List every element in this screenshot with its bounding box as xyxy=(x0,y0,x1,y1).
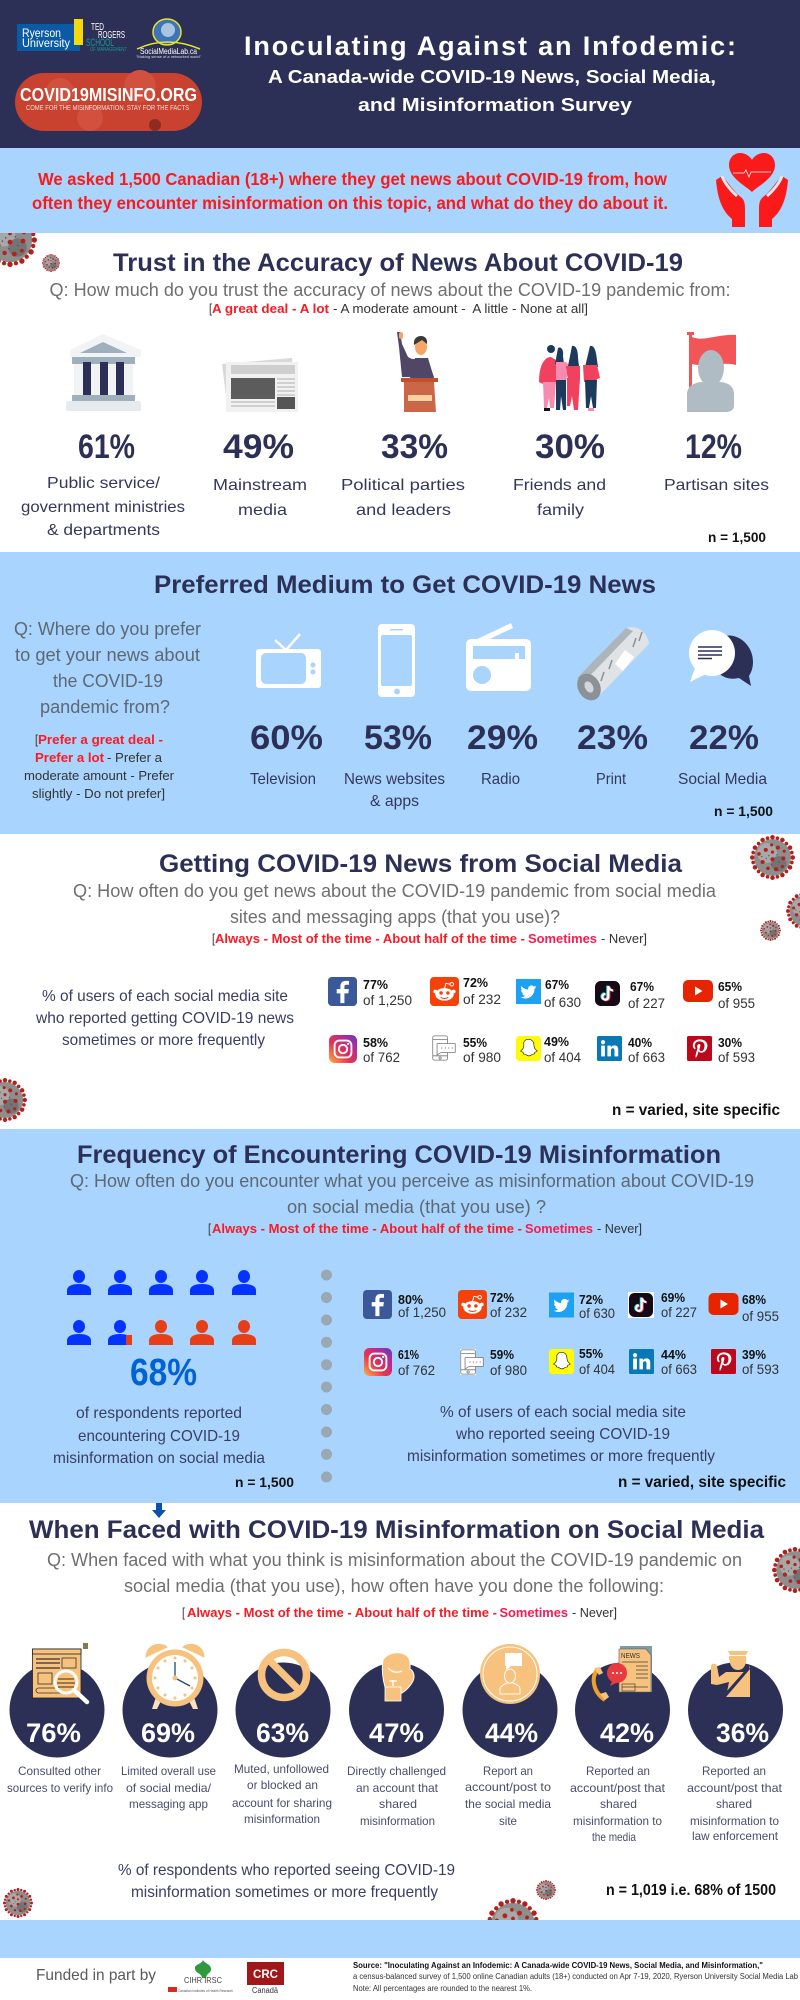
stat: public service: & departments xyxy=(47,522,160,539)
action: report to media xyxy=(570,1646,670,1844)
action: muted unfollowed or blocked xyxy=(232,1652,332,1826)
logo: COVID19MISINFO.ORG xyxy=(15,70,202,131)
response scale xyxy=(212,932,647,946)
stat: political parties: and leaders xyxy=(356,502,451,519)
stat: TikTok: 69% xyxy=(661,1290,685,1305)
stat: television: Television xyxy=(250,771,316,788)
description xyxy=(407,1404,715,1465)
action: report to law enforcement xyxy=(687,1651,783,1843)
title: Inoculating Against an Infodemic: xyxy=(244,31,736,61)
stat: print: Print xyxy=(596,771,626,788)
action: muted unfollowed or blocked: account for sharing xyxy=(232,1796,332,1810)
logo: SocialMediaLab xyxy=(136,19,202,59)
logo: Ted Rogers School of Management: OF MANAGEMENT xyxy=(90,47,127,53)
stat: mainstream media: Mainstream xyxy=(213,477,307,494)
stat: Snapchat xyxy=(516,1034,581,1065)
action: limited overall use: messaging app xyxy=(129,1797,208,1811)
action: report to site: site xyxy=(499,1814,517,1828)
action: directly challenged: misinformation xyxy=(360,1814,435,1828)
action: report to media: account/post that xyxy=(570,1781,666,1795)
logo: SocialMediaLab: SocialMediaLab.ca xyxy=(140,47,197,56)
stat: Twitter: 72% xyxy=(579,1292,603,1307)
stat: Instagram: 58% xyxy=(363,1035,388,1050)
icon: police officer xyxy=(711,1651,750,1697)
action: directly challenged: 47% xyxy=(369,1718,424,1748)
description: who reported getting COVID-19 news xyxy=(35,1010,294,1027)
stat: partisan sites xyxy=(664,428,769,494)
stat: Pinterest: 30% xyxy=(718,1035,742,1050)
question: on social media (that you use) ? xyxy=(287,1197,546,1217)
stat: YouTube xyxy=(708,1292,779,1324)
action: consulted other sources: Consulted other xyxy=(18,1764,101,1778)
response scale: [ xyxy=(182,1606,185,1620)
stat: friends and family: 30% xyxy=(535,428,605,466)
action: limited overall use: Limited overall use xyxy=(121,1764,216,1778)
action: report to law enforcement: Reported an xyxy=(702,1764,766,1778)
sample size: n = varied, site specific xyxy=(612,1102,780,1119)
action: report to law enforcement: 36% xyxy=(716,1718,769,1748)
stat: radio: 29% xyxy=(467,719,538,757)
stat: Twitter: of 630 xyxy=(579,1305,615,1321)
stat: messaging apps: of 980 xyxy=(463,1049,501,1065)
response scale xyxy=(209,302,588,316)
logo: Ted Rogers School of Management xyxy=(86,22,127,53)
response scale: - Prefer a xyxy=(107,751,162,765)
action: muted unfollowed or blocked: misinformation xyxy=(244,1812,320,1826)
icon: speech bubbles xyxy=(689,630,753,686)
panel: intro band xyxy=(0,148,800,233)
response scale: Prefer a great deal - xyxy=(38,733,163,747)
heading: Getting COVID-19 News from Social Media xyxy=(159,850,683,878)
stat: friends and family xyxy=(513,428,606,519)
stat: news websites xyxy=(344,719,445,810)
stat: Facebook: 77% xyxy=(363,977,388,992)
stat: Facebook: of 1,250 xyxy=(398,1304,446,1320)
logo: CRC Canada: Canadä xyxy=(252,1986,279,1995)
stat: friends and family: family xyxy=(537,502,584,519)
pictogram: people xyxy=(67,1270,256,1345)
action: muted unfollowed or blocked: Muted, unfollowed xyxy=(234,1762,329,1776)
response scale: A great deal - A lot xyxy=(212,302,330,316)
panel: footer xyxy=(36,1960,799,1995)
intro text xyxy=(32,169,668,213)
response scale: [ xyxy=(208,1222,211,1236)
stat: LinkedIn: 44% xyxy=(661,1347,686,1362)
icon: government building xyxy=(66,334,141,411)
description: sometimes or more frequently xyxy=(62,1032,265,1049)
action: report to site: account/post to xyxy=(465,1780,551,1794)
stat: TikTok xyxy=(595,979,665,1011)
stat: messaging apps: of 980 xyxy=(490,1362,527,1378)
logo: COVID19MISINFO.ORG: COME FOR THE MISINFORMATION. STAY FOR THE FACTS xyxy=(26,105,189,112)
stat: TikTok: of 227 xyxy=(661,1304,697,1320)
response scale: [ xyxy=(35,733,38,747)
response scale: - A moderate amount - A little - None at all] xyxy=(333,302,588,316)
response scale: Always - Most of the time - About half of the time - xyxy=(215,932,525,946)
stat: public service: Public service/ xyxy=(47,475,161,492)
stat: messaging apps: 59% xyxy=(490,1347,514,1362)
icon: person reporting xyxy=(480,1644,540,1704)
response scale: [ xyxy=(209,302,212,316)
description: misinformation sometimes or more frequently xyxy=(131,1884,438,1901)
action: directly challenged xyxy=(347,1653,446,1828)
stat: Instagram xyxy=(364,1347,435,1378)
action: limited overall use: of social media/ xyxy=(126,1781,212,1795)
source note: Source: "Inoculating Against an Infodemic: A Canada-wide COVID-19 News, Social Media, and Misinformation," xyxy=(353,1960,763,1970)
icon: radio xyxy=(466,623,531,691)
logo: Ted Rogers School of Management: ROGERS xyxy=(98,30,125,41)
question: sites and messaging apps (that you use)? xyxy=(230,907,560,927)
stat: Twitter: of 630 xyxy=(544,994,581,1010)
logo: Ryerson University: University xyxy=(22,38,70,50)
stat: television xyxy=(250,719,323,788)
sample size: n = 1,019 i.e. 68% of 1500 xyxy=(606,1882,776,1899)
stat: TikTok: of 227 xyxy=(628,995,665,1011)
logo: CIHR: CIHR IRSC xyxy=(184,1975,222,1985)
action: report to law enforcement: law enforcement xyxy=(692,1829,779,1843)
response scale xyxy=(24,733,174,801)
title xyxy=(244,31,736,115)
arrow xyxy=(152,1503,166,1518)
response scale: Always - Most of the time - About half of the time - xyxy=(212,1222,522,1236)
logo: CIHR xyxy=(168,1960,233,1993)
intro text: often they encounter misinformation on this topic, and what do they do about it. xyxy=(32,193,668,213)
icon: boxing glove xyxy=(382,1653,414,1701)
action: report to media: 42% xyxy=(600,1718,654,1748)
response scale: [ xyxy=(212,932,215,946)
question: pandemic from? xyxy=(40,697,170,717)
stat: Instagram: of 762 xyxy=(363,1049,400,1065)
question: Q: When faced with what you think is misinformation about the COVID-19 pandemic on xyxy=(47,1550,742,1570)
action: report to law enforcement: shared xyxy=(716,1797,752,1811)
description: % of users of each social media site xyxy=(440,1404,686,1421)
stat: partisan sites: 12% xyxy=(685,428,742,466)
stat: TikTok xyxy=(628,1290,697,1320)
stat: messaging apps xyxy=(460,1347,527,1378)
action: report to site: 44% xyxy=(485,1718,538,1748)
stat: Facebook xyxy=(363,1290,446,1320)
action: limited overall use: 69% xyxy=(141,1718,195,1748)
question: to get your news about xyxy=(15,645,200,665)
stat: Twitter xyxy=(549,1292,615,1321)
icon: partisan flag and person xyxy=(687,332,736,412)
stat: Reddit xyxy=(458,1290,527,1320)
stat: Snapchat: 49% xyxy=(544,1034,569,1049)
logo: COVID19MISINFO.ORG: COVID19MISINFO.ORG xyxy=(20,85,197,105)
band: bottom divider xyxy=(0,1920,800,1958)
stat: Snapchat: of 404 xyxy=(579,1361,615,1377)
response scale xyxy=(208,1222,642,1236)
heading: Frequency of Encountering COVID-19 Misinformation xyxy=(77,1141,721,1169)
source note: Note: All percentages are rounded to the nearest 1%. xyxy=(353,1984,532,1993)
response scale: slightly - Do not prefer] xyxy=(32,787,165,801)
action: directly challenged: Directly challenged xyxy=(347,1764,446,1778)
action: report to site: the social media xyxy=(465,1797,551,1811)
stat: Reddit xyxy=(430,975,501,1007)
stat: Pinterest xyxy=(711,1347,779,1377)
action: directly challenged: shared xyxy=(379,1797,417,1811)
icon: prohibited sign xyxy=(262,1652,306,1698)
response scale xyxy=(182,1606,617,1620)
description: encountering COVID-19 xyxy=(78,1428,240,1445)
panel: frequency of encountering misinformation xyxy=(0,1129,800,1503)
stat: TikTok: 67% xyxy=(630,979,654,994)
stat: YouTube xyxy=(683,979,755,1011)
response scale: moderate amount - Prefer xyxy=(24,769,174,783)
response scale: - Never] xyxy=(601,932,647,946)
question: Q: How much do you trust the accuracy of news about the COVID-19 pandemic from: xyxy=(50,280,730,300)
description xyxy=(35,988,294,1049)
action: limited overall use xyxy=(121,1644,218,1811)
description: % of respondents who reported seeing COVID-19 xyxy=(118,1862,455,1879)
sample size: n = 1,500 xyxy=(708,529,766,545)
stat: Twitter xyxy=(516,977,581,1010)
response scale: Always - Most of the time - About half of the time - xyxy=(187,1606,497,1620)
stat: Facebook: 80% xyxy=(398,1292,423,1307)
description xyxy=(118,1862,455,1901)
action: directly challenged: an account that xyxy=(356,1781,439,1795)
heading: Trust in the Accuracy of News About COVID-19 xyxy=(113,249,683,277)
stat: Pinterest: of 593 xyxy=(718,1049,755,1065)
icon: friends and family xyxy=(539,345,600,411)
logo: CIHR: Canadian Institutes of Health Research xyxy=(178,1988,233,1993)
icon: politician at podium xyxy=(397,332,438,412)
stat: Reddit: of 232 xyxy=(490,1304,527,1320)
stat: mainstream media xyxy=(213,428,307,519)
question: Q: How often do you encounter what you perceive as misinformation about COVID-19 xyxy=(70,1171,754,1191)
response scale: Sometimes xyxy=(528,932,597,946)
logo: Ryerson University xyxy=(17,19,83,51)
title: and Misinformation Survey xyxy=(358,94,633,115)
source note xyxy=(353,1960,799,1993)
icon: alarm clock xyxy=(146,1644,204,1709)
stat: political parties: Political parties xyxy=(341,477,465,494)
intro text: We asked 1,500 Canadian (18+) where they get news about COVID-19 from, how xyxy=(38,169,667,189)
stat: Twitter: 67% xyxy=(545,977,569,992)
icon: document with magnifier xyxy=(32,1643,88,1702)
stat: Reddit: 72% xyxy=(490,1290,514,1305)
icon: smartphone xyxy=(378,624,415,697)
action: report to site: Report an xyxy=(483,1764,533,1778)
action: report to media: misinformation to xyxy=(573,1814,662,1828)
stat: Pinterest xyxy=(687,1035,755,1065)
stat: YouTube: of 955 xyxy=(718,995,755,1011)
panel: when faced with misinformation xyxy=(7,1516,783,1901)
response scale: Prefer a lot xyxy=(35,751,105,765)
stat: Snapchat: 55% xyxy=(579,1346,603,1361)
description: who reported seeing COVID-19 xyxy=(455,1426,670,1443)
stat: television: 60% xyxy=(250,719,323,757)
action: consulted other sources: 76% xyxy=(26,1718,81,1748)
stat: LinkedIn: of 663 xyxy=(628,1049,665,1065)
stat: Instagram: of 762 xyxy=(398,1362,435,1378)
logo: CRC Canada: CRC xyxy=(253,1967,278,1981)
stat: Snapchat xyxy=(549,1346,615,1377)
stat: radio xyxy=(467,719,538,788)
stat: LinkedIn: of 663 xyxy=(661,1361,697,1377)
stat: news websites: & apps xyxy=(370,793,419,810)
description: misinformation sometimes or more frequently xyxy=(407,1448,715,1465)
icon: heart in hands xyxy=(716,153,788,227)
panel: getting news from social media xyxy=(35,850,780,1119)
stat: Instagram xyxy=(329,1035,400,1065)
sample size: n = varied, site specific xyxy=(618,1474,786,1491)
stat: social media: 22% xyxy=(689,719,759,757)
stat: Facebook: of 1,250 xyxy=(363,992,412,1008)
stat: radio: Radio xyxy=(481,771,520,788)
description: % of users of each social media site xyxy=(42,988,288,1005)
icon: rolled newspaper xyxy=(572,627,649,705)
action: muted unfollowed or blocked: 63% xyxy=(256,1718,309,1748)
funding label: Funded in part by xyxy=(36,1967,156,1984)
icon: television xyxy=(256,634,321,688)
question xyxy=(70,1171,754,1217)
stat: Pinterest: of 593 xyxy=(742,1361,779,1377)
heading: Preferred Medium to Get COVID-19 News xyxy=(154,571,656,599)
stat: Pinterest: 39% xyxy=(742,1347,766,1362)
icon: newspaper, phone and chat bubble xyxy=(594,1646,652,1700)
stat: LinkedIn: 40% xyxy=(628,1035,652,1050)
action: report to media: shared xyxy=(600,1797,637,1811)
description: misinformation on social media xyxy=(53,1450,265,1467)
question: the COVID-19 xyxy=(53,671,163,691)
action: report to site xyxy=(462,1644,558,1828)
stat: public service xyxy=(21,428,185,539)
action: report to law enforcement: misinformation to xyxy=(690,1814,779,1828)
logo: SocialMediaLab: "Making sense of a networked world" xyxy=(136,55,202,59)
action: report to media: the media xyxy=(592,1830,636,1844)
stat: mainstream media: media xyxy=(238,502,287,519)
question: Q: How often do you get news about the COVID-19 pandemic from social media xyxy=(73,881,717,901)
panel: preferred medium xyxy=(0,552,800,834)
logo: Ryerson University: Ryerson xyxy=(22,28,61,40)
question xyxy=(14,619,201,717)
stat: YouTube: of 955 xyxy=(742,1308,779,1324)
stat: YouTube: 65% xyxy=(718,979,742,994)
question: social media (that you use), how often have you done the following: xyxy=(124,1576,664,1596)
action: muted unfollowed or blocked: or blocked an xyxy=(247,1778,318,1792)
logo: Ted Rogers School of Management: TED xyxy=(91,22,104,33)
logo: Ted Rogers School of Management: SCHOOL xyxy=(86,37,114,49)
stat: messaging apps xyxy=(433,1035,501,1065)
stat: news websites: 53% xyxy=(364,719,432,757)
title: A Canada-wide COVID-19 News, Social Media, xyxy=(268,66,716,87)
sample size: n = 1,500 xyxy=(714,803,773,819)
heading: When Faced with COVID-19 Misinformation on Social Media xyxy=(29,1516,765,1544)
stat: news websites: News websites xyxy=(344,771,445,788)
stat: public service: government ministries xyxy=(21,499,185,516)
question: Q: Where do you prefer xyxy=(14,619,201,639)
stat: Facebook xyxy=(328,977,412,1008)
stat: print: 23% xyxy=(577,719,648,757)
stat: Snapchat: of 404 xyxy=(544,1049,581,1065)
stat: political parties xyxy=(341,428,465,519)
response scale: - Never] xyxy=(572,1606,617,1620)
response scale: Sometimes xyxy=(500,1606,568,1620)
panel: trust in news xyxy=(21,249,769,545)
stat: social media xyxy=(678,719,767,788)
stat: LinkedIn xyxy=(629,1347,697,1377)
stat: social media: Social Media xyxy=(678,771,767,788)
dotted divider xyxy=(321,1270,332,1482)
stat: 68 percent: 68% xyxy=(130,1352,197,1394)
logo: CRC Canada xyxy=(247,1962,284,1995)
action: consulted other sources xyxy=(7,1643,113,1795)
stat: LinkedIn xyxy=(597,1035,665,1065)
stat: political parties: 33% xyxy=(381,428,448,466)
response scale: - Never] xyxy=(597,1222,642,1236)
stat: Reddit: of 232 xyxy=(463,991,501,1007)
sample size: n = 1,500 xyxy=(235,1474,294,1490)
action: report to media: Reported an xyxy=(586,1764,650,1778)
question xyxy=(47,1550,742,1596)
action: consulted other sources: sources to verify info xyxy=(7,1781,113,1795)
question xyxy=(73,881,717,927)
stat: friends and family: Friends and xyxy=(513,477,606,494)
stat: Reddit: 72% xyxy=(463,975,488,990)
response scale: Sometimes xyxy=(525,1222,593,1236)
stat: mainstream media: 49% xyxy=(223,428,294,466)
icon: newspaper, phone and chat bubble: NEWS xyxy=(621,1651,640,1660)
icon: newspaper xyxy=(222,358,298,412)
description: of respondents reported xyxy=(76,1405,242,1422)
description xyxy=(53,1405,265,1467)
stat: print xyxy=(577,719,648,788)
stat: YouTube: 68% xyxy=(742,1292,766,1307)
stat: messaging apps: 55% xyxy=(463,1035,487,1050)
panel: header xyxy=(0,0,800,148)
stat: public service: 61% xyxy=(78,428,135,466)
action: report to law enforcement: account/post that xyxy=(687,1781,783,1795)
stat: partisan sites: Partisan sites xyxy=(664,477,769,494)
stat: Instagram: 61% xyxy=(398,1347,419,1362)
